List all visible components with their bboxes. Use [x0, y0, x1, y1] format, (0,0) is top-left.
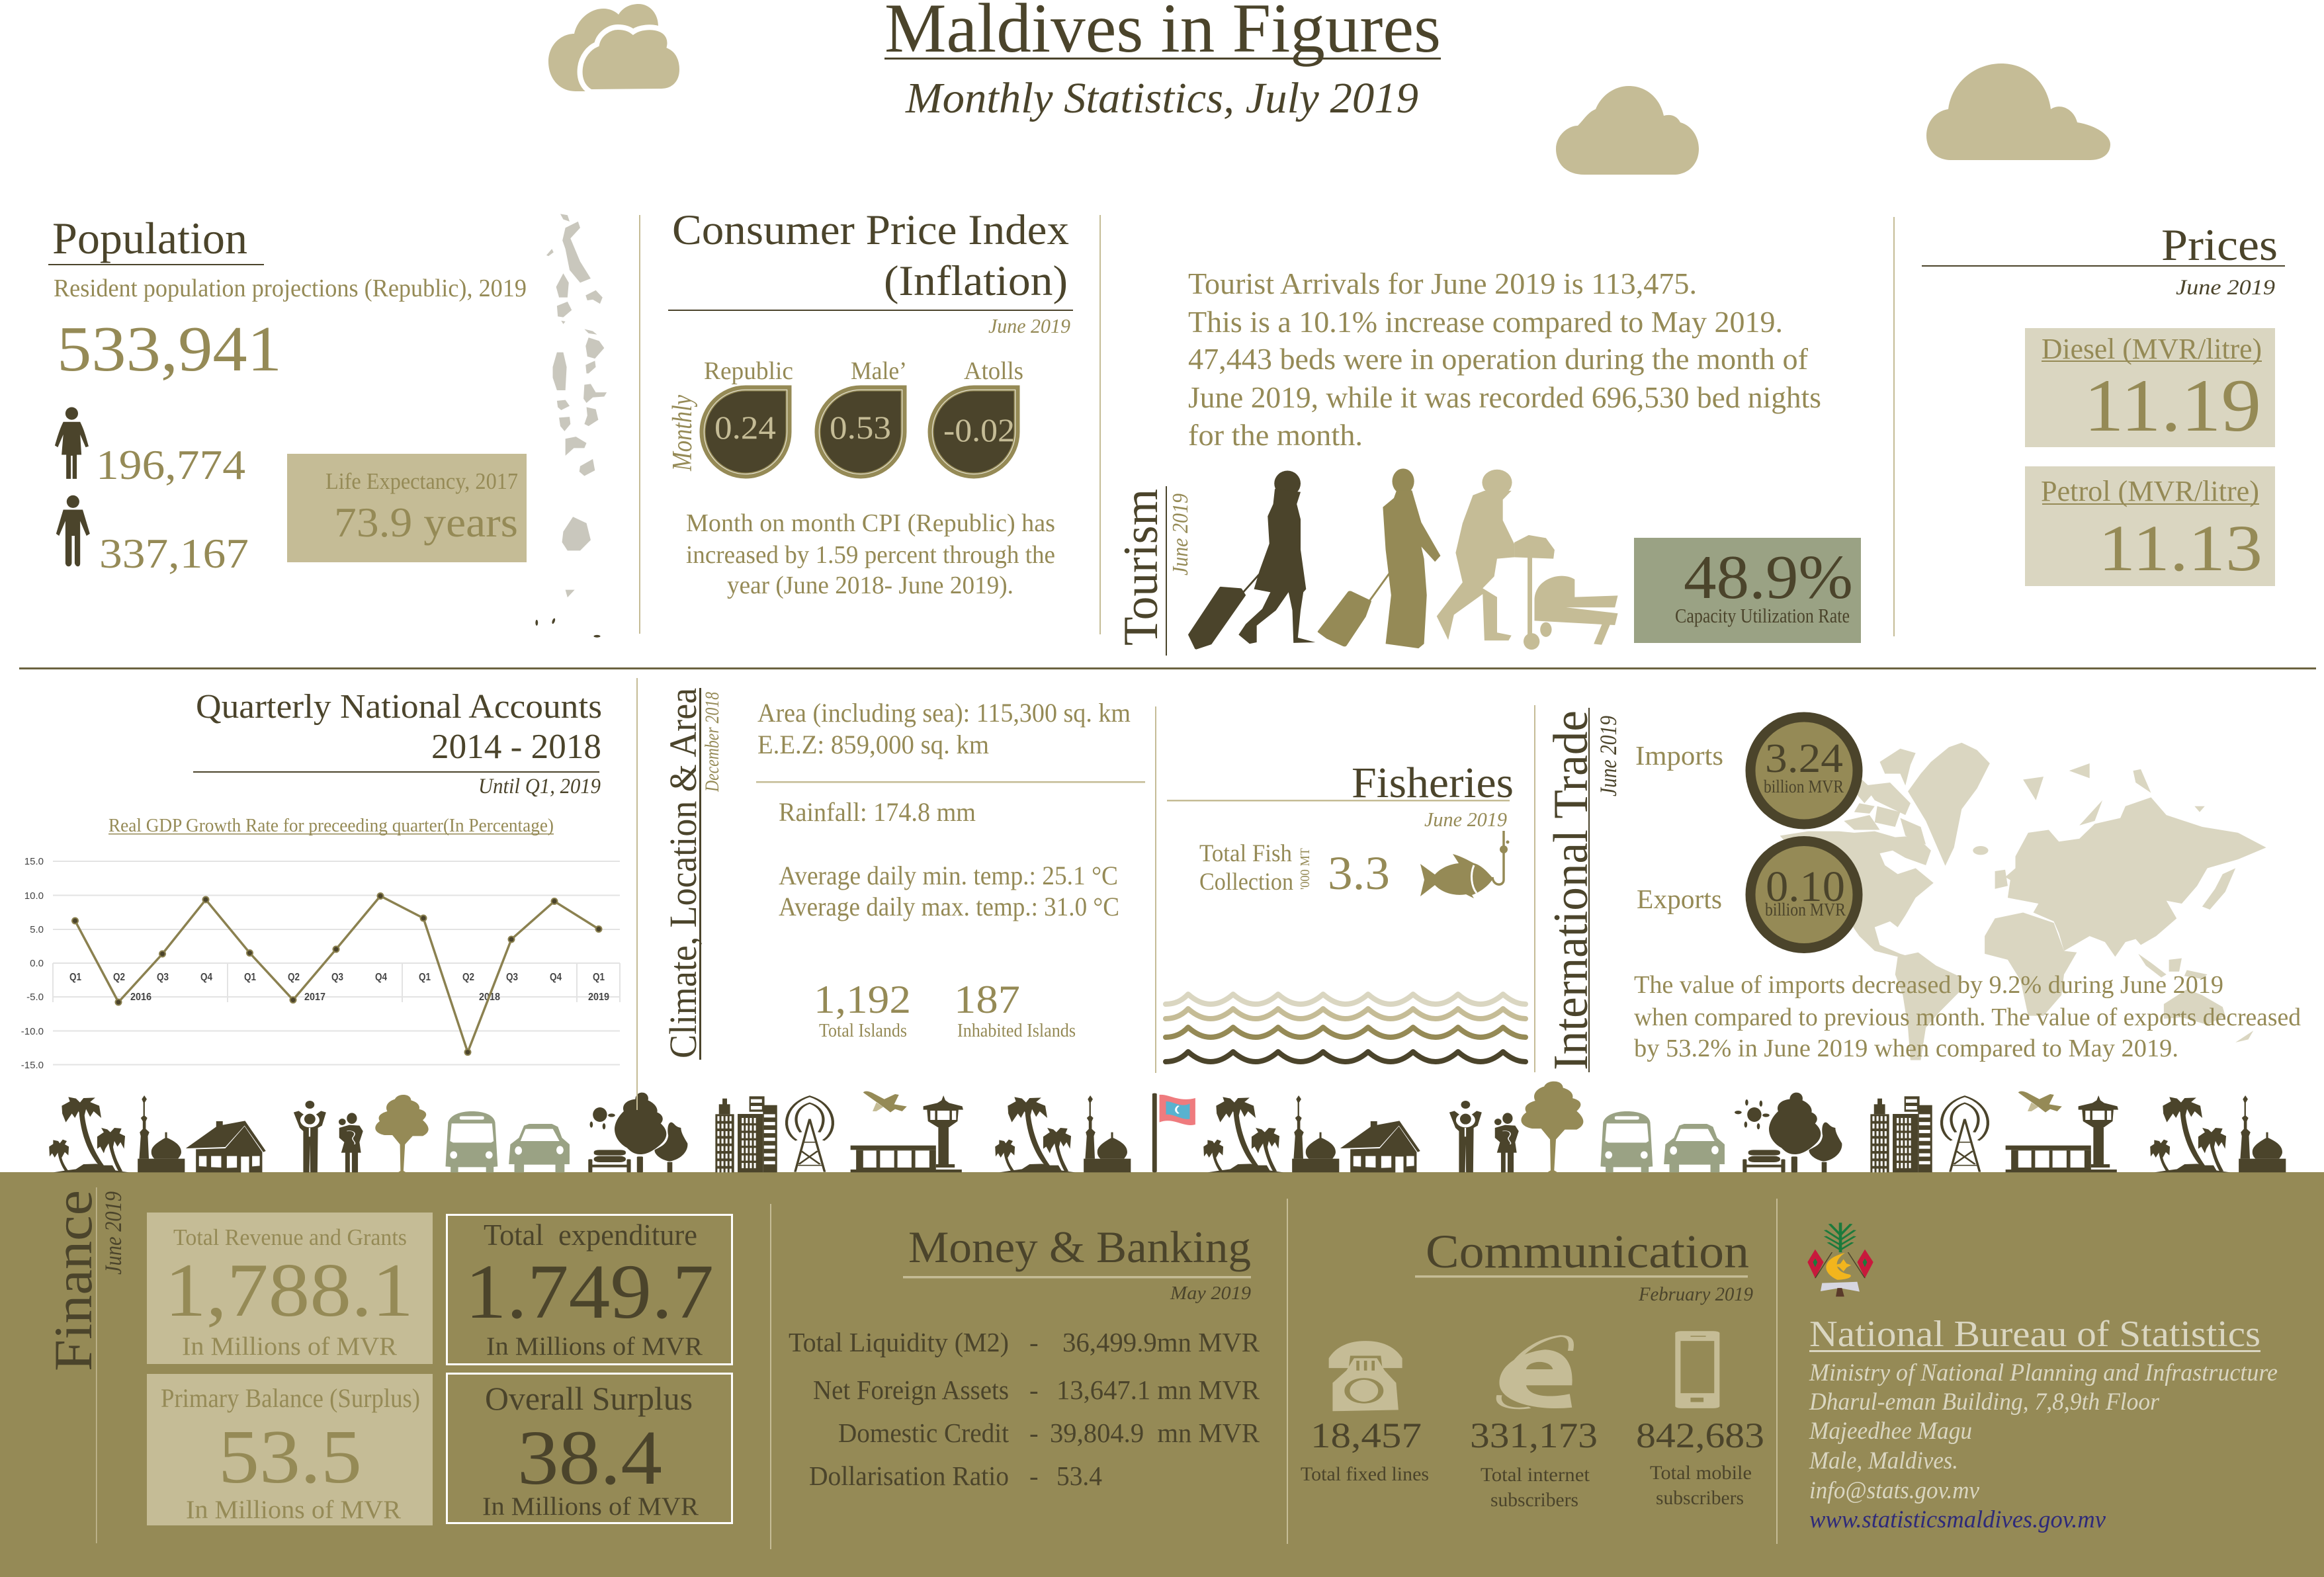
exports: Exports: [1637, 884, 1722, 914]
line chart: real GDP growth: Q4: [200, 972, 212, 983]
total revenue box: Total Revenue and Grants: [173, 1224, 407, 1250]
petrol price box: [2025, 466, 2275, 586]
bureau name: National Bureau of Statistics: [1809, 1314, 2260, 1355]
total population: 533,941: [57, 314, 282, 384]
fixed lines figure: 18,457: [1311, 1416, 1422, 1455]
trade description: The value of imports decreased by 9.2% during June 2019: [1634, 971, 2223, 999]
map of the Maldives: [535, 214, 607, 638]
line chart: real GDP growth: Q3: [157, 972, 169, 983]
imports: [1635, 717, 1858, 824]
region labels: Republic: [704, 357, 793, 385]
total liquidity: -: [1029, 1327, 1039, 1357]
domestic credit: [838, 1418, 1260, 1448]
imports: billion MVR: [1764, 777, 1844, 796]
line chart: real GDP growth: Q2: [462, 972, 474, 983]
icon: radio tower: [1942, 1096, 1988, 1172]
CPI description: [686, 509, 1055, 599]
area and EEZ: [757, 698, 1131, 759]
fisheries heading: Fisheries: [1352, 759, 1514, 807]
total expenditure box: Total expenditure: [484, 1218, 697, 1252]
line chart: real GDP growth: -15.0: [21, 1060, 44, 1071]
CPI heading: (Inflation): [884, 257, 1068, 305]
fisheries date: June 2019: [1424, 808, 1507, 831]
panel: climate, location and area: [662, 688, 1145, 1060]
tourism heading: June 2019: [1168, 493, 1193, 575]
icon: bus: [1600, 1111, 1653, 1172]
CPI description: Month on month CPI (Republic) has: [686, 509, 1055, 537]
chart title: Real GDP Growth Rate for preceeding quarter(In Percentage): [108, 815, 554, 836]
tourism description: This is a 10.1% increase compared to May 2019.: [1188, 306, 1783, 339]
tourism description: [1188, 267, 1821, 452]
life expectancy box: Life Expectancy, 2017: [325, 468, 518, 494]
drop: republic: 0.24: [714, 409, 776, 446]
overall surplus box: Overall Surplus: [485, 1380, 693, 1417]
total expenditure box: 1.749.7: [465, 1248, 714, 1335]
total expenditure box: [447, 1215, 732, 1364]
total islands: [814, 978, 911, 1041]
finance heading: June 2019: [100, 1191, 126, 1275]
icon: large cloud: [1926, 64, 2110, 160]
exports: 0.10: [1766, 863, 1845, 911]
panel: communication: [1301, 1225, 1764, 1511]
population heading: Population: [52, 213, 247, 263]
drop: atolls: -0.02: [943, 411, 1015, 448]
icon: buildings: [715, 1096, 777, 1172]
bureau address: info@stats.gov.mv: [1809, 1477, 1980, 1504]
net foreign assets: -: [1029, 1375, 1039, 1405]
total revenue box: [147, 1213, 433, 1364]
line chart: real GDP growth: 0.0: [30, 958, 44, 969]
region labels: Atolls: [964, 357, 1023, 385]
line chart: real GDP growth: Q1: [419, 972, 431, 983]
internet subscribers figure: Total internet: [1481, 1464, 1590, 1486]
panel: finance: [43, 1187, 732, 1543]
mobile subscribers figure: subscribers: [1656, 1487, 1744, 1509]
imports: Imports: [1635, 740, 1723, 771]
icon: buildings: [1870, 1096, 1932, 1172]
icon: palms and mosque: [49, 1095, 185, 1172]
icon: family: [294, 1101, 363, 1172]
overall surplus box: 38.4: [517, 1414, 662, 1501]
dollarisation ratio: -: [1029, 1461, 1039, 1491]
panel: international trade: [1544, 708, 2301, 1072]
icon: family: [1449, 1101, 1519, 1172]
line chart: real GDP growth: Q1: [69, 972, 81, 983]
bureau address: Majeedhee Magu: [1809, 1418, 1972, 1445]
diesel price box: [2025, 328, 2275, 447]
monthly label: Monthly: [667, 395, 698, 472]
total fish collection: [1199, 840, 1390, 900]
line chart: real GDP growth: Q2: [113, 972, 125, 983]
total liquidity: 36,499.9mn MVR: [1062, 1327, 1260, 1357]
net foreign assets: [813, 1375, 1260, 1405]
line chart: real GDP growth: Q3: [506, 972, 518, 983]
line chart: real GDP growth: 2018: [479, 992, 500, 1003]
total islands: 1,192: [814, 978, 911, 1021]
diesel price box: 11.19: [2084, 364, 2261, 447]
world map: [1780, 743, 2266, 1060]
panel: fisheries: [1166, 759, 1526, 1062]
drop: male: 0.53: [830, 409, 891, 446]
icon: airport terminal: [851, 1095, 963, 1172]
line chart: real GDP growth: Q4: [550, 972, 562, 983]
icon: cloud: [1556, 86, 1699, 175]
tourism heading: [1114, 486, 1193, 656]
line chart: real GDP growth: 15.0: [24, 856, 44, 867]
inhabited islands: 187: [954, 978, 1020, 1021]
climate heading: [662, 688, 723, 1060]
line chart: real GDP growth: Q3: [331, 972, 343, 983]
money heading: Money & Banking: [908, 1222, 1251, 1272]
internet subscribers figure: [1470, 1416, 1598, 1511]
subtitle: Monthly Statistics, July 2019: [905, 74, 1418, 122]
primary balance box: 53.5: [218, 1415, 362, 1500]
icon: house: [1340, 1121, 1420, 1172]
panel: money and banking: [789, 1222, 1260, 1491]
bureau address: www.statisticsmaldives.gov.mv: [1809, 1506, 2106, 1533]
rainfall and temperature: Average daily min. temp.: 25.1 °C: [779, 861, 1118, 890]
icon: Maldives flag: [1152, 1093, 1195, 1172]
icon: house: [186, 1121, 266, 1172]
panel: national bureau of statistics: [1807, 1222, 2278, 1533]
money date: May 2019: [1170, 1283, 1251, 1304]
imports: 3.24: [1765, 736, 1843, 781]
drop: atolls: [931, 388, 1017, 476]
total fish collection: Collection: [1199, 869, 1293, 896]
icon: tree: [1521, 1082, 1583, 1172]
CPI description: year (June 2018- June 2019).: [727, 572, 1013, 599]
line chart: real GDP growth: -10.0: [21, 1026, 44, 1037]
primary balance box: [147, 1374, 433, 1525]
exports: billion MVR: [1765, 900, 1846, 919]
icon: tree: [375, 1095, 429, 1172]
inhabited islands: [954, 978, 1076, 1041]
bottom band: [0, 1172, 2324, 1577]
icon: airplane: [2018, 1091, 2062, 1113]
icon: park with bench: [588, 1093, 687, 1172]
fixed lines figure: Total fixed lines: [1301, 1463, 1429, 1485]
icon: airplane: [863, 1091, 907, 1113]
rainfall and temperature: Rainfall: 174.8 mm: [779, 797, 976, 827]
total fish collection: 3.3: [1328, 847, 1390, 900]
line chart: real GDP growth: 2016: [130, 992, 151, 1003]
tourist silhouette: man with luggage trolley: [1437, 470, 1618, 650]
icon: man: [56, 495, 90, 566]
panel: prices: [1922, 220, 2285, 586]
icon: radio tower: [787, 1096, 833, 1172]
internet subscribers figure: 331,173: [1470, 1416, 1598, 1455]
icon: double cloud: [548, 4, 688, 99]
panel: population: [48, 213, 607, 638]
life expectancy box: 73.9 years: [334, 499, 518, 546]
overall surplus box: In Millions of MVR: [482, 1492, 699, 1521]
icon: park with bench: [1735, 1093, 1842, 1172]
prices heading: Prices: [2161, 220, 2278, 270]
line chart: real GDP growth: [21, 856, 620, 1071]
tourism description: for the month.: [1188, 419, 1363, 452]
icon: car: [509, 1124, 570, 1172]
female population: 196,774: [96, 442, 245, 488]
finance heading: Finance: [43, 1190, 103, 1371]
tourism heading: Tourism: [1114, 489, 1168, 646]
tourism description: June 2019, while it was recorded 696,530 bed nights: [1188, 381, 1821, 414]
panel: quarterly national accounts: [21, 688, 620, 1071]
life expectancy box: [287, 454, 527, 562]
bureau address: Ministry of National Planning and Infrastructure: [1809, 1359, 2278, 1386]
region labels: Male’: [851, 357, 907, 385]
icon: telephone: [1329, 1341, 1402, 1411]
panel: tourism: [1114, 267, 1861, 656]
population subtitle: Resident population projections (Republic), 2019: [54, 275, 527, 302]
line chart: real GDP growth: 10.0: [24, 890, 44, 902]
trade description: by 53.2% in June 2019 when compared to May 2019.: [1634, 1035, 2178, 1062]
petrol price box: 11.13: [2098, 511, 2262, 585]
trade heading: [1544, 708, 1621, 1072]
CPI heading: [668, 206, 1073, 311]
primary balance box: In Millions of MVR: [186, 1496, 401, 1524]
dollarisation ratio: 53.4: [1056, 1461, 1102, 1491]
petrol price box: Petrol (MVR/litre): [2041, 475, 2259, 507]
region labels: [704, 357, 1023, 385]
rainfall and temperature: Average daily max. temp.: 31.0 °C: [779, 892, 1119, 921]
CPI heading: Consumer Price Index: [672, 206, 1069, 254]
mobile subscribers figure: [1636, 1416, 1764, 1509]
domestic credit: -: [1029, 1418, 1039, 1448]
total fish collection: '000 MT: [1298, 848, 1313, 890]
capacity utilization box: 48.9%: [1684, 543, 1853, 612]
total liquidity: Total Liquidity (M2): [789, 1327, 1009, 1357]
total liquidity: [789, 1327, 1260, 1357]
trade description: when compared to previous month. The value of exports decreased: [1634, 1003, 2301, 1031]
finance heading: [43, 1187, 126, 1543]
icon: airport terminal: [2006, 1095, 2118, 1172]
trade description: [1634, 971, 2301, 1062]
overall surplus box: [447, 1373, 732, 1523]
icon: palms and mosque: [1203, 1095, 1339, 1172]
icon: palms and mosque: [995, 1095, 1131, 1172]
icon: palms and mosque: [2150, 1095, 2286, 1172]
drop: male: [818, 388, 904, 476]
internet subscribers figure: subscribers: [1490, 1489, 1578, 1511]
bureau address: Dharul-eman Building, 7,8,9th Floor: [1809, 1388, 2160, 1416]
line chart: real GDP growth: Q2: [288, 972, 300, 983]
trade heading: International Trade: [1544, 710, 1598, 1070]
icon: internet explorer: [1499, 1336, 1572, 1408]
total revenue box: In Millions of MVR: [182, 1332, 397, 1361]
tourist silhouette: woman with suitcase: [1190, 471, 1315, 648]
diesel price box: Diesel (MVR/litre): [2042, 333, 2262, 365]
mobile subscribers figure: Total mobile: [1650, 1462, 1752, 1484]
icon: car: [1664, 1124, 1725, 1172]
accounts heading: [193, 688, 602, 773]
primary balance box: Primary Balance (Surplus): [161, 1383, 420, 1413]
icon: mobile phone: [1675, 1331, 1719, 1408]
total islands: Total Islands: [819, 1021, 907, 1041]
drop: republic: [703, 388, 789, 476]
icon: bus: [445, 1111, 497, 1172]
fixed lines figure: [1301, 1416, 1429, 1485]
line chart: real GDP growth: 2019: [588, 992, 609, 1003]
communication heading: Communication: [1426, 1225, 1749, 1278]
line chart: real GDP growth: Q4: [375, 972, 387, 983]
line chart: real GDP growth: -5.0: [26, 992, 44, 1003]
area and EEZ: E.E.Z: 859,000 sq. km: [757, 730, 989, 759]
climate heading: Climate, Location & Area: [662, 688, 705, 1058]
male population: 337,167: [99, 531, 249, 577]
accounts heading: 2014 - 2018: [431, 728, 601, 766]
line chart: real GDP growth: Q1: [244, 972, 256, 983]
icon: woman: [55, 407, 89, 479]
icon: national emblem: [1807, 1222, 1873, 1297]
trade heading: June 2019: [1595, 716, 1621, 796]
tourism description: 47,443 beds were in operation during the month of: [1188, 343, 1808, 376]
mobile subscribers figure: 842,683: [1636, 1416, 1764, 1455]
communication date: February 2019: [1638, 1283, 1753, 1305]
icon: fish on hook: [1420, 831, 1510, 898]
climate heading: December 2018: [701, 692, 723, 792]
net foreign assets: Net Foreign Assets: [813, 1375, 1009, 1405]
bureau address: [1809, 1359, 2278, 1533]
total fish collection: Total Fish: [1199, 840, 1292, 867]
net foreign assets: 13,647.1 mn MVR: [1056, 1375, 1260, 1405]
domestic credit: 39,804.9 mn MVR: [1050, 1418, 1260, 1448]
area and EEZ: Area (including sea): 115,300 sq. km: [757, 698, 1131, 728]
line chart: real GDP growth: 2017: [304, 992, 325, 1003]
accounts date: Until Q1, 2019: [478, 775, 601, 798]
domestic credit: Domestic Credit: [838, 1418, 1010, 1448]
inhabited islands: Inhabited Islands: [957, 1021, 1076, 1041]
panel: consumer price index: [667, 206, 1073, 599]
CPI date: June 2019: [988, 314, 1070, 337]
CPI description: increased by 1.59 percent through the: [686, 541, 1055, 569]
skyline illustration: [49, 1082, 2286, 1172]
dollarisation ratio: Dollarisation Ratio: [809, 1461, 1009, 1491]
bureau address: Male, Maldives.: [1809, 1447, 1958, 1474]
rainfall and temperature: [779, 797, 1119, 921]
exports: [1637, 841, 1858, 949]
waves: [1166, 994, 1526, 1062]
capacity utilization box: [1634, 538, 1861, 643]
total expenditure box: In Millions of MVR: [486, 1332, 703, 1361]
prices date: June 2019: [2176, 276, 2275, 300]
accounts heading: Quarterly National Accounts: [196, 688, 602, 726]
line chart: real GDP growth: 5.0: [30, 924, 44, 935]
line chart: real GDP growth: Q1: [593, 972, 605, 983]
tourism description: Tourist Arrivals for June 2019 is 113,475.: [1188, 267, 1697, 300]
tourist silhouette: man with suitcase: [1320, 468, 1440, 648]
capacity utilization box: Capacity Utilization Rate: [1675, 604, 1850, 627]
total revenue box: 1,788.1: [165, 1248, 413, 1333]
